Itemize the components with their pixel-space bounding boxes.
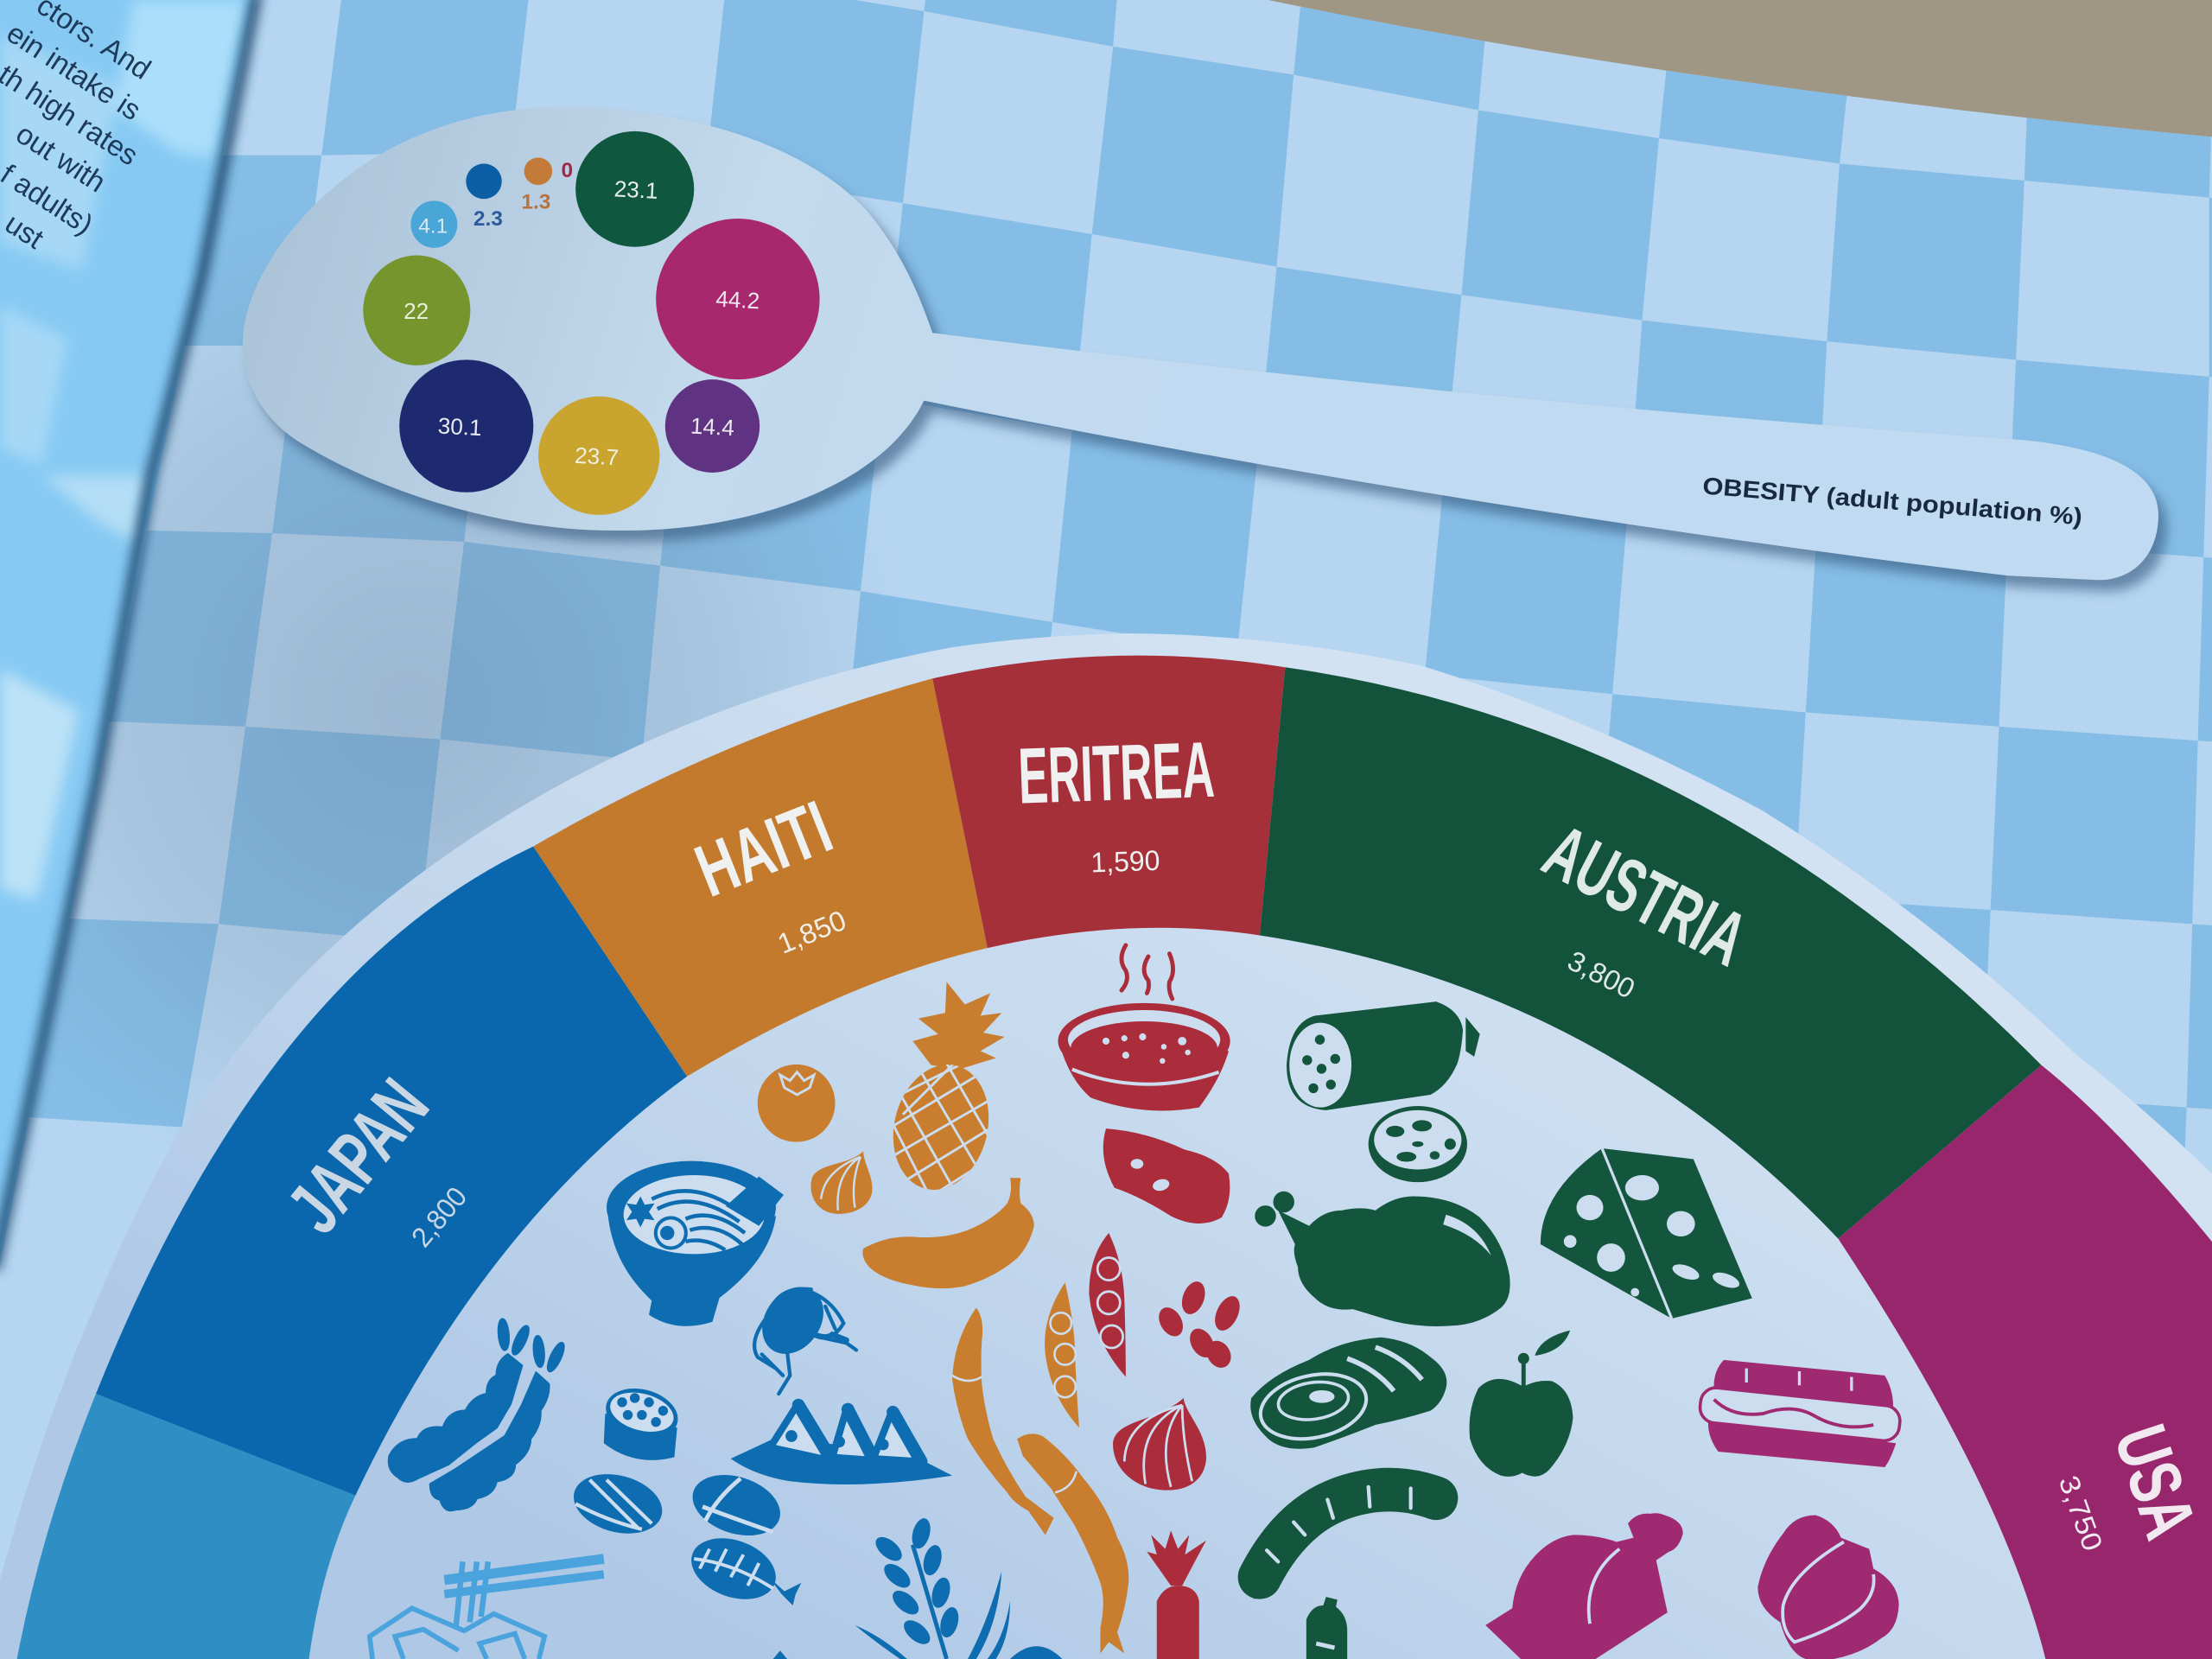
icon: sushi slice two bbox=[684, 1465, 788, 1546]
bubble: 2.3 bbox=[466, 163, 503, 231]
icon: beetroot bbox=[1147, 1530, 1206, 1659]
left page text block: out with bbox=[10, 118, 111, 199]
icon: rolled roast bbox=[1250, 1338, 1446, 1449]
icon: green apple bbox=[1470, 1331, 1573, 1477]
icon: salami bbox=[1287, 1001, 1480, 1110]
book spine shadow bbox=[0, 0, 257, 1269]
icon: leafy plant bbox=[773, 1516, 1062, 1659]
icon: salami slice bbox=[1369, 1106, 1467, 1182]
bubble: 2.3: 2.3 bbox=[474, 207, 503, 231]
bubble: 23.7 bbox=[538, 397, 659, 515]
icon: small orange onion bbox=[810, 1151, 873, 1214]
bubble: 44.2 bbox=[656, 219, 820, 379]
sector: light blue bbox=[17, 1394, 355, 1659]
icon: red pea pod bbox=[1089, 1233, 1126, 1376]
bubble: 1.3: 1.3 bbox=[521, 191, 550, 214]
icon: pineapple bbox=[893, 982, 1004, 1190]
left page bbox=[0, 0, 254, 1264]
bubble: 4.1: 4.1 bbox=[418, 214, 448, 238]
sector: Eritrea bbox=[932, 656, 1285, 948]
sector: Haiti: 1,850 bbox=[773, 904, 850, 960]
icon: cheese wedge bbox=[1541, 1148, 1752, 1319]
icon: red meat cut bbox=[1103, 1128, 1230, 1224]
icon: magenta turkey bbox=[1485, 1513, 1683, 1659]
icon: bell pepper bbox=[1758, 1515, 1899, 1659]
sector: Eritrea: 1,590 bbox=[1090, 844, 1160, 879]
bubble: 22 bbox=[363, 256, 470, 365]
sector: USA: 3,750 bbox=[2053, 1471, 2109, 1555]
sector: Austria bbox=[1260, 667, 2041, 1238]
panel: obesity spoon chart bbox=[243, 107, 2158, 580]
spoon handle label: OBESITY (adult population %) bbox=[1701, 472, 2083, 530]
icon: orange pea pod bbox=[1045, 1282, 1079, 1427]
wheel plate bbox=[0, 633, 2212, 1659]
bubble: 30.1 bbox=[399, 359, 533, 493]
icon: hot dog sandwich bbox=[1699, 1360, 1902, 1467]
icon: green sausage bbox=[1244, 1487, 1453, 1599]
bubble: 23.1 bbox=[575, 131, 694, 247]
sector: Austria: AUSTRIA bbox=[1531, 808, 1761, 982]
bubble: 23.7: 23.7 bbox=[574, 442, 620, 470]
icon: red beans bbox=[1154, 1278, 1244, 1372]
icon: soup bowl bbox=[1058, 945, 1230, 1110]
icon: shrimp bbox=[389, 1319, 567, 1510]
icon: ramen bowl bbox=[607, 1161, 784, 1326]
icon: tomato bbox=[758, 1065, 836, 1142]
left page text block bbox=[0, 0, 156, 256]
sector: Haiti: HAITI bbox=[685, 785, 842, 913]
sector: Haiti bbox=[533, 678, 988, 1077]
icon: red onion bbox=[1113, 1398, 1206, 1491]
sector: Japan: 2,800 bbox=[405, 1180, 473, 1253]
bubble: 14.4: 14.4 bbox=[690, 413, 735, 441]
icon: ikura sushi bbox=[601, 1381, 683, 1460]
icon: shrimp sushi bbox=[683, 1528, 801, 1611]
bubble: 4.1 bbox=[410, 200, 457, 248]
sector: USA bbox=[1838, 1065, 2212, 1659]
bubble: 30.1: 30.1 bbox=[437, 413, 482, 441]
bubble: 23.1: 23.1 bbox=[613, 175, 658, 204]
bubble: 44.2: 44.2 bbox=[715, 286, 760, 314]
spoon shape bbox=[243, 107, 2158, 580]
sector: Japan bbox=[96, 847, 687, 1496]
icon: orange fish two bbox=[1017, 1433, 1128, 1653]
sector: Eritrea: ERITREA bbox=[1017, 726, 1216, 821]
icon: green roast chicken bbox=[1255, 1192, 1510, 1326]
icon: sushi slice one bbox=[567, 1465, 669, 1542]
icon: banana bbox=[862, 1178, 1034, 1288]
icon: onigiri plate bbox=[731, 1405, 952, 1484]
left page text block: ein intake is bbox=[1, 17, 146, 127]
left page text block: ust bbox=[0, 207, 49, 256]
bubble: 22: 22 bbox=[404, 298, 429, 324]
icon: noodles and chopsticks bbox=[370, 1559, 604, 1659]
panel: food wheel bbox=[0, 633, 2212, 1659]
bubble: 14.4 bbox=[665, 379, 760, 473]
bubble: 1.3 bbox=[521, 157, 552, 214]
bubble: 0: 0 bbox=[562, 159, 573, 182]
sector: Austria: 3,800 bbox=[1563, 944, 1640, 1005]
icon: orange fish one bbox=[952, 1307, 1054, 1535]
icon: small green sausage bbox=[1306, 1597, 1347, 1659]
icon: crab bbox=[751, 1276, 856, 1394]
sector: Japan: JAPAN bbox=[271, 1063, 445, 1248]
